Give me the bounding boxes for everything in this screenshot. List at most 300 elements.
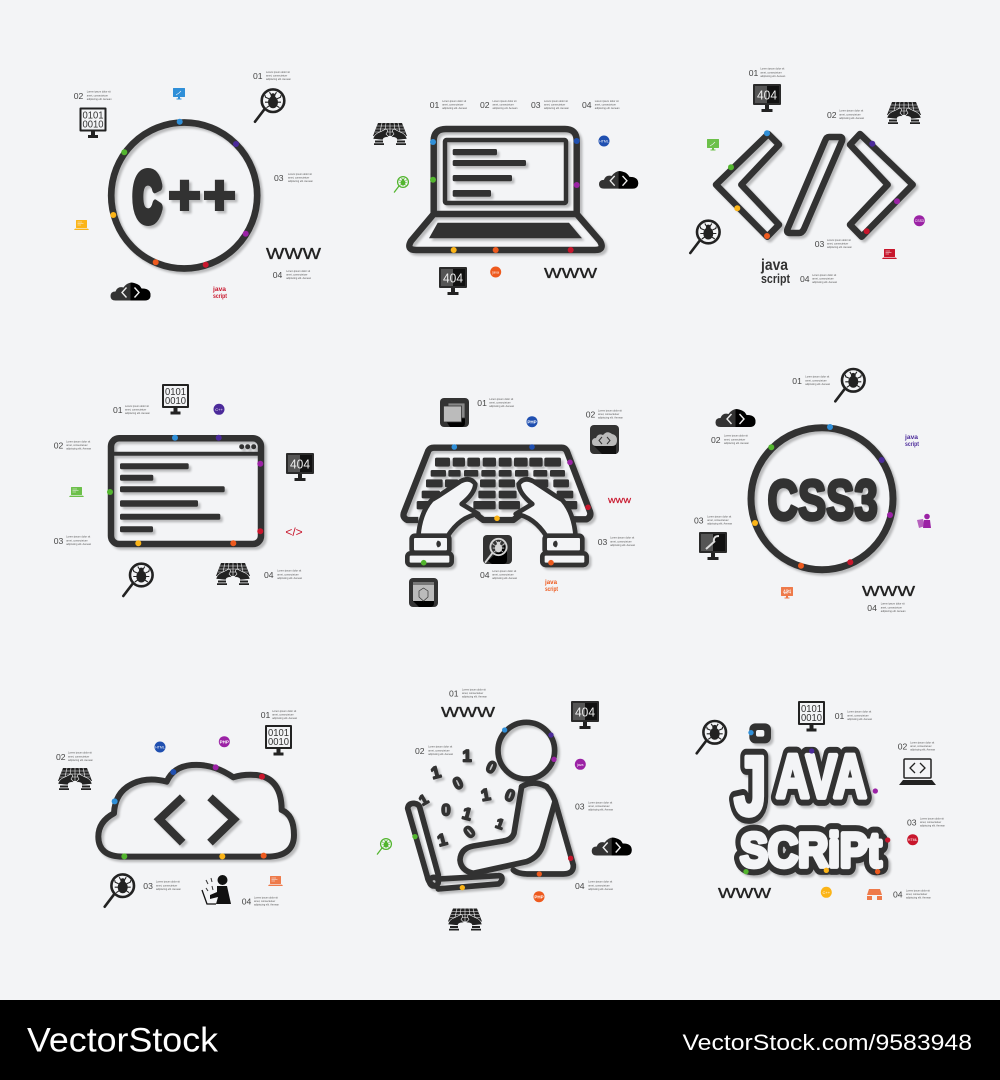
label 04: 04 <box>800 274 810 284</box>
label 02: amet, consectetuer <box>724 438 745 441</box>
label 03: amet, consectetuer <box>920 821 941 824</box>
footer url: VectorStock.com/9583948 <box>682 1030 972 1055</box>
label 01: Lorem ipsum dolor sit <box>805 376 830 379</box>
person outline <box>408 722 573 889</box>
label 01: 01 <box>477 398 487 408</box>
label 03: adipiscing elit. Aenean <box>288 180 313 183</box>
label 03: adipiscing elit. Aenean <box>156 888 181 891</box>
icon: keyboard hands <box>448 908 482 930</box>
icon: www: WWW <box>718 885 772 902</box>
label 03: adipiscing elit. Aenean <box>707 522 733 525</box>
label 03: Lorem ipsum dolor sit <box>610 537 635 540</box>
label 02: amet, consectetuer <box>598 413 619 416</box>
icon: cloud code <box>592 838 632 856</box>
label 04: adipiscing elit. Aenean <box>906 896 931 899</box>
label 04: 04 <box>867 603 877 613</box>
icon: binary monitor: 0101 <box>801 704 822 715</box>
cloud dots <box>112 764 267 859</box>
label 04: Lorem ipsum dolor sit <box>277 570 302 573</box>
footer bar <box>0 1000 1000 1080</box>
label 01 <box>113 405 150 415</box>
label 04: amet, consectetuer <box>595 104 616 107</box>
icon: binary monitor: 0010 <box>801 713 822 724</box>
icon: 404 monitor <box>753 84 781 112</box>
label 03: 03 <box>274 173 284 183</box>
icon: bug magnifier <box>835 369 865 401</box>
label 03: adipiscing elit. Aenean <box>588 808 614 811</box>
label 03: amet, consectetuer <box>707 519 729 522</box>
person outline: 1 <box>429 762 443 783</box>
label 03: 03 <box>815 239 824 249</box>
label 02: adipiscing elit. Aenean <box>428 753 454 756</box>
icon: binary monitor: 0101 <box>82 110 104 122</box>
icon: 404 monitor: 404 <box>575 704 595 720</box>
label 04: adipiscing elit. Aenean <box>286 277 312 280</box>
label 04: adipiscing elit. Aenean <box>277 577 303 580</box>
label 02 <box>56 752 93 762</box>
label 03: Lorem ipsum dolor sit <box>156 881 180 884</box>
label 01: amet, consectetuer <box>489 402 511 405</box>
icon: shield square <box>409 578 438 607</box>
label 04: amet, consectetuer <box>881 606 902 609</box>
icon: orange monitor: 404 <box>783 590 791 596</box>
label 04: Lorem ipsum dolor sit <box>254 896 278 899</box>
label 02 <box>827 110 865 120</box>
icon: javascript red: script <box>213 293 228 300</box>
icon: javascript orange <box>544 579 559 593</box>
panel: person coding <box>377 688 632 930</box>
panel: code brackets <box>690 68 925 286</box>
icon: green bug <box>394 177 408 192</box>
label 04: amet, consectetuer <box>812 278 834 281</box>
label 01: adipiscing elit. Aenean <box>462 695 487 698</box>
icon: windows square <box>440 398 469 427</box>
icon: javascript red <box>212 286 228 300</box>
label 04: Lorem ipsum dolor sit <box>812 274 837 277</box>
label 03: Lorem ipsum dolor sit <box>827 239 851 242</box>
person outline: 1 <box>435 830 449 850</box>
icon: binary monitor: 0101 <box>165 387 186 398</box>
ring with C++ <box>111 122 257 268</box>
icon: binary monitor <box>798 701 825 732</box>
label 02: Lorem ipsum dolor sit <box>87 91 111 94</box>
label 04: amet, consectetuer <box>906 893 927 896</box>
label 03: 03 <box>143 881 153 891</box>
label 02: adipiscing elit. Aenean <box>910 748 936 751</box>
label 04: Lorem ipsum dolor sit <box>588 881 613 884</box>
label 02: 02 <box>898 741 907 751</box>
label 04: Lorem ipsum dolor sit <box>906 889 930 892</box>
label 04: adipiscing elit. Aenean <box>492 577 518 580</box>
icon: php circle <box>526 416 538 427</box>
label 03 <box>598 537 636 547</box>
label 02: Lorem ipsum dolor sit <box>492 100 517 103</box>
label 02: Lorem ipsum dolor sit <box>839 110 864 113</box>
icon: javascript orange: script <box>545 586 559 593</box>
label 01: 01 <box>261 710 270 720</box>
person outline: 0 <box>483 757 500 778</box>
label 01: 01 <box>792 376 802 386</box>
label 01: adipiscing elit. Aenean <box>266 78 291 81</box>
outlined javascript lettering: SCRiPt <box>740 823 882 877</box>
label 01: adipiscing elit. Aenean <box>760 75 786 78</box>
label 04: 04 <box>242 896 251 906</box>
label 02 <box>898 741 936 752</box>
label 02: adipiscing elit. Aenean <box>724 442 749 445</box>
label 02 <box>711 435 749 445</box>
label 01: adipiscing elit. Aenean <box>442 107 468 110</box>
label 04: amet, consectetuer <box>286 274 308 277</box>
outlined javascript lettering <box>734 723 882 877</box>
javascript dots <box>743 730 890 874</box>
icon: orange monitor <box>781 587 793 598</box>
label 02 <box>54 440 92 450</box>
label 03: 03 <box>694 515 704 525</box>
label 03: 03 <box>54 536 63 546</box>
footer logo: VectorStock <box>27 1022 219 1060</box>
icon: javascript purple <box>904 434 920 448</box>
person outline: 1 <box>460 804 474 824</box>
label 04: 04 <box>575 881 585 891</box>
label 01: Lorem ipsum dolor sit <box>272 710 297 713</box>
label 03: adipiscing elit. Aenean <box>544 107 569 110</box>
label 03: Lorem ipsum dolor sit <box>588 801 613 804</box>
label 01: amet, consectetuer <box>805 379 827 382</box>
label 01 <box>430 100 468 110</box>
label 04 <box>575 881 614 891</box>
label 01: Lorem ipsum dolor sit <box>462 688 486 691</box>
panel: browser window <box>54 384 314 596</box>
icon: css circle <box>914 215 925 226</box>
person outline: 1 <box>494 815 507 833</box>
label 02: amet, consectetuer <box>428 749 450 752</box>
label 02: 02 <box>54 440 63 450</box>
icon: bug magnifier <box>690 221 720 253</box>
panel: cloud <box>56 710 298 907</box>
label 02: amet, consectetuer <box>839 113 861 116</box>
label 03: Lorem ipsum dolor sit <box>707 515 732 518</box>
icon: 404 monitor: 404 <box>290 456 310 472</box>
label 04 <box>893 889 931 900</box>
icon: php circle <box>534 891 544 902</box>
label 04 <box>582 100 620 110</box>
label 03: amet, consectetuer <box>156 884 177 887</box>
label 01: 01 <box>749 68 758 78</box>
label 03: adipiscing elit. Aenean <box>827 246 852 249</box>
label 01: amet, consectetuer <box>125 409 146 412</box>
icon: bug magnifier <box>255 89 284 122</box>
bracket outlines <box>716 134 913 237</box>
label 02: Lorem ipsum dolor sit <box>910 741 935 744</box>
outlined javascript lettering: AVA <box>776 742 867 811</box>
label 04: amet, consectetuer <box>588 884 610 887</box>
label 04: Lorem ipsum dolor sit <box>595 100 619 103</box>
label 03 <box>143 881 181 891</box>
panel: javascript <box>697 701 945 902</box>
icon: green laptop <box>69 487 84 497</box>
icon: 404 monitor <box>286 453 314 481</box>
icon: orange keyboard hands <box>867 889 882 900</box>
ring with CSS3 <box>751 428 893 570</box>
label 01: Lorem ipsum dolor sit <box>489 398 514 401</box>
icon: php circle: PHP <box>220 739 229 744</box>
person outline: 1 <box>416 791 431 809</box>
label 03: Lorem ipsum dolor sit <box>920 817 944 820</box>
icon: java circle: java <box>576 763 584 767</box>
icon: javascript dark: script <box>761 271 791 286</box>
label 03: amet, consectetuer <box>610 540 632 543</box>
label 02: adipiscing elit. Aenean <box>66 447 92 450</box>
keyboard and hands <box>403 448 590 565</box>
label 04: amet, consectetuer <box>277 573 299 576</box>
person outline: 0 <box>450 773 466 794</box>
label 01: adipiscing elit. Aenean <box>805 383 831 386</box>
label 02: Lorem ipsum dolor sit <box>68 752 92 755</box>
ring dots <box>752 424 893 569</box>
label 01: Lorem ipsum dolor sit <box>442 100 466 103</box>
icon: cloud code <box>599 171 638 189</box>
label 03: amet, consectetuer <box>544 104 565 107</box>
panel: laptop <box>373 100 638 295</box>
label 02: adipiscing elit. Aenean <box>492 107 518 110</box>
icon: 404 monitor <box>439 267 467 295</box>
icon: javascript purple: java <box>904 434 918 441</box>
label 02: amet, consectetuer <box>910 745 932 748</box>
icon: c++ circle <box>821 887 832 898</box>
label 01: amet, consectetuer <box>442 104 464 107</box>
panel: typing hands <box>403 398 636 607</box>
label 02: 02 <box>56 752 66 762</box>
icon: cloud square <box>590 425 619 454</box>
icon: binary monitor <box>80 108 106 138</box>
icon: binary monitor <box>162 384 189 414</box>
label 02: 02 <box>586 409 595 419</box>
icon: 404 monitor: 404 <box>757 88 777 102</box>
icon: keyboard hands <box>58 768 92 790</box>
label 04 <box>867 603 906 613</box>
icon: html circle <box>598 136 610 146</box>
icon: yellow laptop <box>74 220 89 230</box>
label 03: 03 <box>531 100 541 110</box>
icon: bug magnifier <box>105 874 134 907</box>
label 04 <box>480 570 518 580</box>
label 03 <box>531 100 569 110</box>
label 02: Lorem ipsum dolor sit <box>598 409 622 412</box>
icon: person at laptop <box>202 875 231 904</box>
icon: orange laptop <box>268 876 283 886</box>
label 02: adipiscing elit. Aenean <box>87 98 112 101</box>
icon: keyboard hands <box>216 563 250 585</box>
icon: php circle <box>219 736 230 747</box>
label 03: adipiscing elit. Aenean <box>66 543 92 546</box>
label 03: amet, consectetuer <box>66 539 88 542</box>
label 01 <box>477 398 515 408</box>
label 02 <box>415 746 454 756</box>
icon: bug magnifier <box>123 564 153 596</box>
label 04: amet, consectetuer <box>492 574 514 577</box>
label 02: Lorem ipsum dolor sit <box>428 746 453 749</box>
label 01: adipiscing elit. Aenean <box>125 412 150 415</box>
person outline: 1 <box>479 785 492 805</box>
label 04: adipiscing elit. Aenean <box>881 610 906 613</box>
label 02: amet, consectetuer <box>66 444 88 447</box>
label 04: adipiscing elit. Aenean <box>812 281 838 284</box>
person outline: 0 <box>460 822 479 842</box>
label 02: amet, consectetuer <box>492 104 514 107</box>
label 03: Lorem ipsum dolor sit <box>66 536 91 539</box>
label 01: amet, consectetuer <box>462 692 483 695</box>
label 03: Lorem ipsum dolor sit <box>288 173 312 176</box>
panel: C++ <box>74 71 322 300</box>
icon: javascript red: java <box>212 286 226 293</box>
icon: html circle: HTML <box>599 140 609 144</box>
laptop outline <box>409 129 602 250</box>
label 04: 04 <box>582 100 592 110</box>
label 02: amet, consectetuer <box>87 94 108 97</box>
icon: green bug <box>377 839 391 854</box>
icon: cloud code <box>716 409 756 427</box>
icon: www: WWW <box>441 704 496 721</box>
ring with C++: + <box>203 163 236 226</box>
label 02: 02 <box>827 110 837 120</box>
label 04: Lorem ipsum dolor sit <box>881 603 905 606</box>
ring with C++: C <box>134 159 161 235</box>
icon: javascript dark: java <box>760 257 788 274</box>
icon: www: WWW <box>862 583 916 600</box>
label 01: adipiscing elit. Aenean <box>489 405 515 408</box>
icon: css circle: CSS3 <box>915 219 924 223</box>
label 04 <box>242 896 279 906</box>
label 02: 02 <box>74 91 83 101</box>
icon: binary monitor: 0010 <box>268 737 289 748</box>
label 01: Lorem ipsum dolor sit <box>760 68 785 71</box>
label 04: amet, consectetuer <box>254 900 275 903</box>
cloud outline <box>98 765 294 857</box>
label 01: Lorem ipsum dolor sit <box>847 711 872 714</box>
icon: java circle: java <box>491 270 499 274</box>
person outline: 0 <box>502 785 517 806</box>
label 04: 04 <box>893 889 903 899</box>
label 01 <box>253 71 291 81</box>
icon: keyboard hands <box>887 102 921 124</box>
icon: html circle: HTML <box>155 746 165 750</box>
outlined javascript lettering: AVA <box>776 742 867 811</box>
outlined javascript lettering: J <box>734 740 766 833</box>
label 01: 01 <box>449 688 459 698</box>
label 02: adipiscing elit. Aenean <box>839 117 865 120</box>
ring with CSS3: CSS3 <box>768 468 878 532</box>
icon: wrench monitor <box>699 532 727 560</box>
label 01: amet, consectetuer <box>847 714 869 717</box>
label 03: amet, consectetuer <box>588 805 610 808</box>
label 02 <box>586 409 623 420</box>
label 03 <box>54 536 92 546</box>
icon: 404 monitor: 404 <box>443 270 463 286</box>
window outline <box>111 438 261 544</box>
label 01: amet, consectetuer <box>272 714 294 717</box>
keyboard dots <box>421 444 591 566</box>
icon: purple person <box>917 514 931 528</box>
label 04 <box>800 274 838 284</box>
icon: cloud code <box>110 283 150 300</box>
window dots <box>107 435 263 546</box>
label 01 <box>749 68 786 78</box>
label 03: Lorem ipsum dolor sit <box>544 100 568 103</box>
label 04: Lorem ipsum dolor sit <box>286 270 310 273</box>
icon: www: WWW <box>266 246 322 263</box>
laptop dots <box>430 138 580 253</box>
label 01: Lorem ipsum dolor sit <box>125 405 149 408</box>
label 01: amet, consectetuer <box>266 75 287 78</box>
label 02: adipiscing elit. Aenean <box>598 416 623 419</box>
label 04: 04 <box>264 570 274 580</box>
icon: blue monitor <box>173 88 185 100</box>
label 03: 03 <box>575 801 585 811</box>
label 03: 03 <box>907 817 917 827</box>
label 01: Lorem ipsum dolor sit <box>266 71 290 74</box>
icon: html circle <box>907 834 918 845</box>
label 03: amet, consectetuer <box>827 243 848 246</box>
label 04: adipiscing elit. Aenean <box>588 888 614 891</box>
label 03: adipiscing elit. Aenean <box>610 544 636 547</box>
label 04: Lorem ipsum dolor sit <box>492 570 517 573</box>
icon: red laptop <box>882 249 897 259</box>
label 01 <box>835 711 873 721</box>
label 02: 02 <box>415 746 425 756</box>
icon: keyboard hands <box>373 123 407 145</box>
label 04: 04 <box>273 270 282 280</box>
label 01: adipiscing elit. Aenean <box>272 717 298 720</box>
label 04: adipiscing elit. Aenean <box>595 107 620 110</box>
ring dots <box>110 119 249 268</box>
icon: javascript dark <box>760 257 791 286</box>
icon: php circle: PHP <box>527 419 537 424</box>
icon: 404 monitor <box>571 701 599 729</box>
person outline: 1 <box>462 747 472 766</box>
icon: html circle <box>154 742 166 752</box>
label 03: 03 <box>598 537 607 547</box>
label 02: Lorem ipsum dolor sit <box>66 440 91 443</box>
icon: www red: WWW <box>608 498 631 505</box>
person dots <box>412 727 573 890</box>
label 04 <box>264 570 303 580</box>
icon: java circle <box>575 759 586 770</box>
label 01: adipiscing elit. Aenean <box>847 718 873 721</box>
label 04: 04 <box>480 570 490 580</box>
icon: binary monitor: 0101 <box>268 728 289 739</box>
icon: java circle <box>490 266 501 278</box>
icon: code red: </> <box>285 525 303 539</box>
label 01 <box>449 688 487 698</box>
label 02: 02 <box>711 435 721 445</box>
label 01: 01 <box>113 405 123 415</box>
ring with C++: + <box>168 163 201 226</box>
label 01: amet, consectetuer <box>760 71 782 74</box>
icon: binary monitor: 0010 <box>165 396 186 407</box>
icon: javascript orange: java <box>544 579 557 586</box>
icon: c++ circle: C++ <box>215 407 223 412</box>
icon: www: WWW <box>544 265 598 282</box>
icon: bug magnifier <box>697 721 726 753</box>
label 03: amet, consectetuer <box>288 177 309 180</box>
person outline: 0 <box>441 800 451 819</box>
label 01: 01 <box>430 100 439 110</box>
label 01 <box>792 376 831 386</box>
label 03: adipiscing elit. Aenean <box>920 824 945 827</box>
label 04: adipiscing elit. Aenean <box>254 903 279 906</box>
outlined javascript lettering: SCRiPt <box>740 823 882 877</box>
panel: CSS3 <box>694 369 931 613</box>
